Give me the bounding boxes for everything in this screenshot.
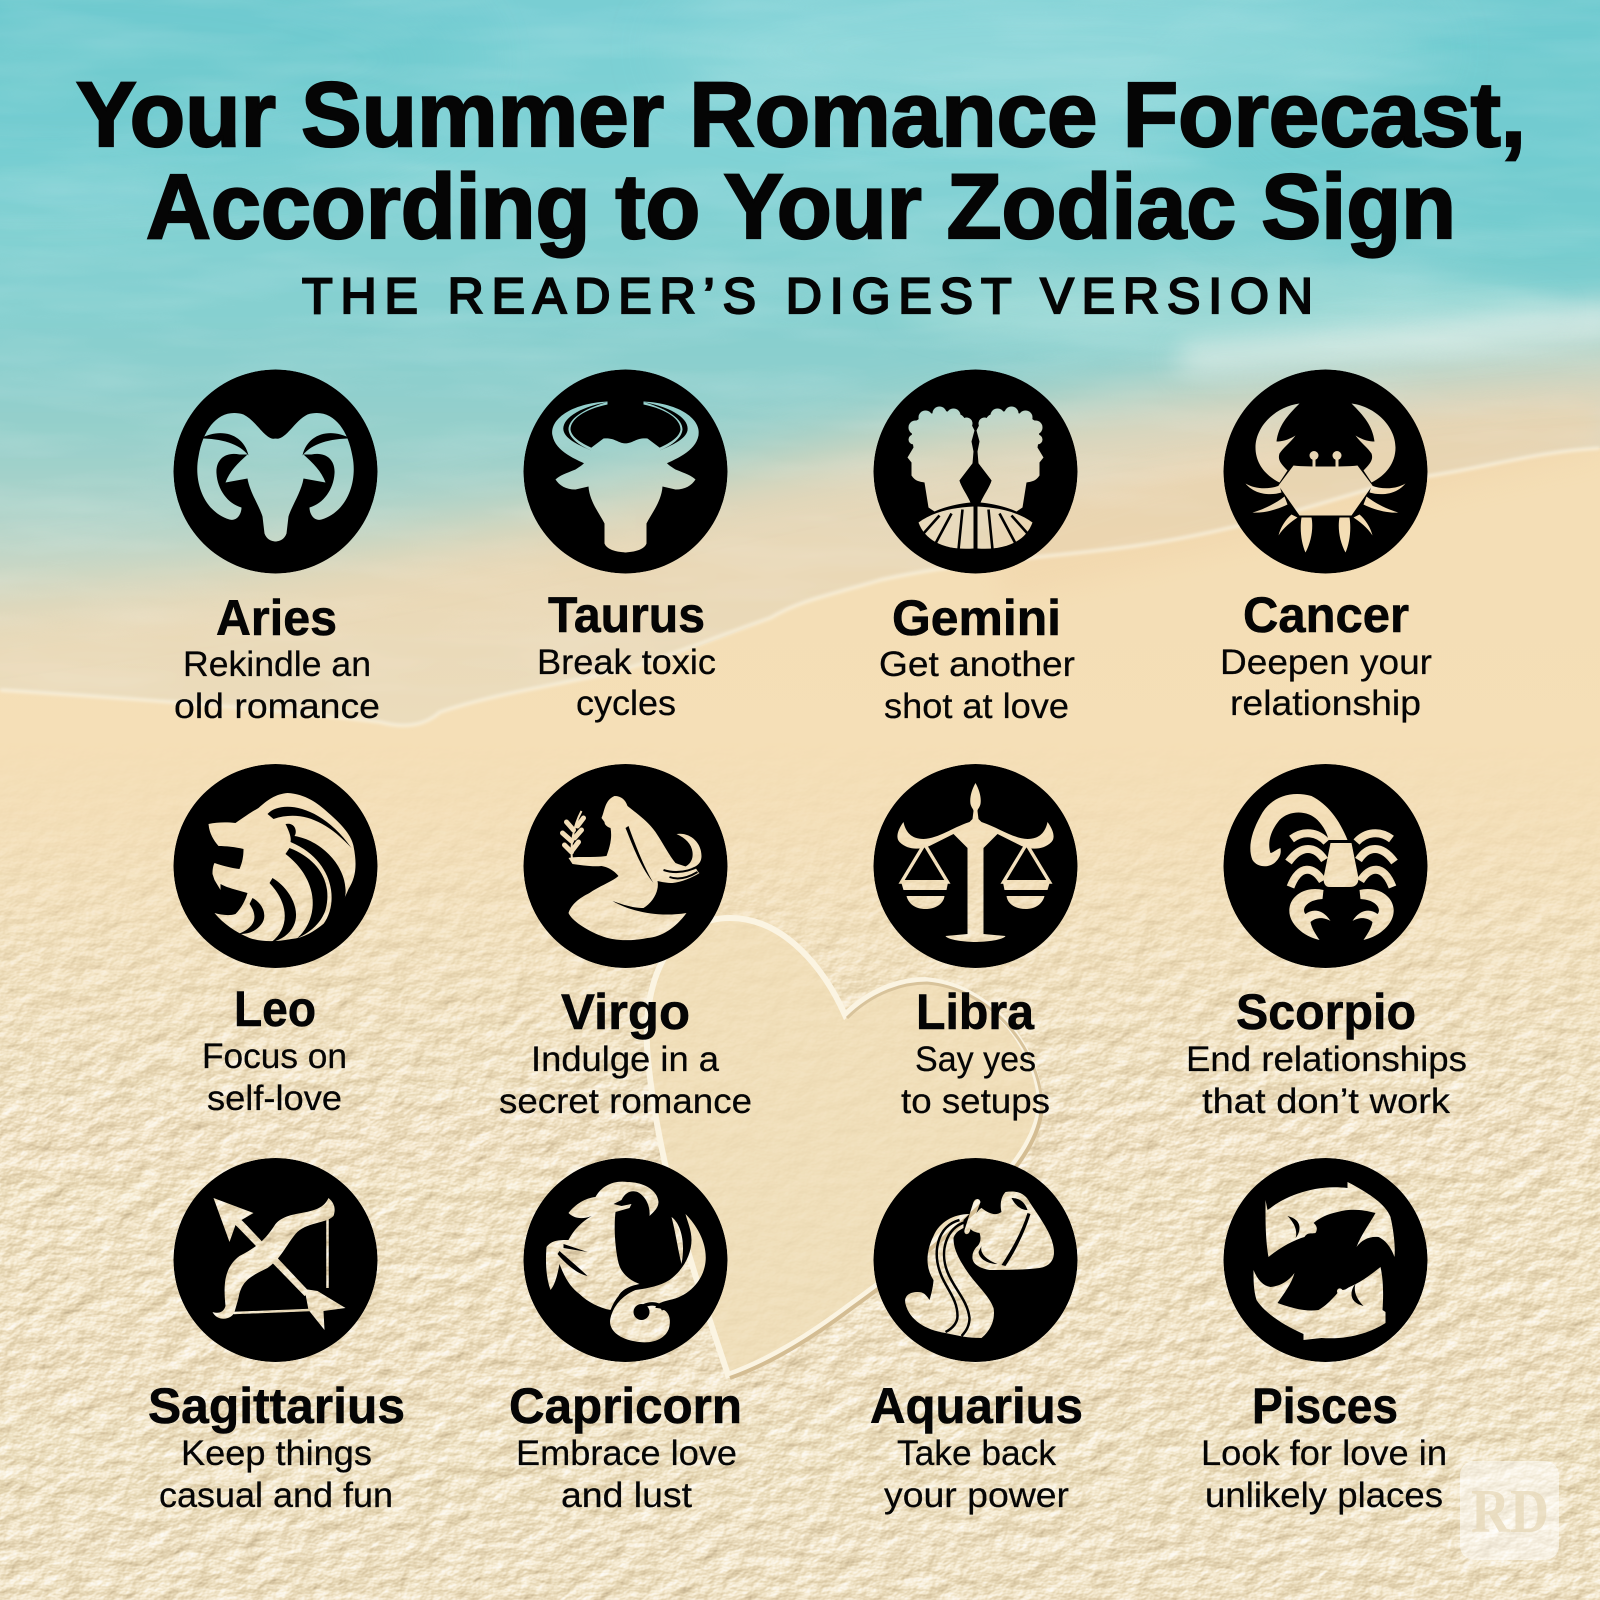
panel: Virgo bbox=[499, 764, 752, 1121]
forecast: Aquarius: your power bbox=[884, 1476, 1069, 1515]
logo: RD watermark bbox=[1460, 1461, 1559, 1560]
icon: fish bbox=[1224, 1158, 1428, 1362]
forecast: Aquarius bbox=[884, 1434, 1069, 1515]
forecast: Taurus: Break toxic bbox=[537, 643, 716, 682]
forecast: Sagittarius: casual and fun bbox=[159, 1476, 393, 1515]
forecast: Aquarius: Take back bbox=[897, 1434, 1056, 1473]
forecast: Sagittarius: Keep things bbox=[181, 1434, 372, 1473]
forecast: Capricorn: Embrace love bbox=[516, 1434, 737, 1473]
forecast: Aries: old romance bbox=[174, 687, 380, 726]
heart drawn in the sand bbox=[647, 918, 1042, 1378]
panel: Aries bbox=[174, 370, 380, 726]
forecast: Pisces bbox=[1201, 1434, 1447, 1515]
label: Virgo: Virgo bbox=[561, 984, 690, 1040]
title bbox=[76, 64, 1526, 258]
forecast: Taurus: cycles bbox=[576, 684, 676, 723]
forecast: Virgo bbox=[499, 1040, 752, 1121]
subtitle: THE READER’S DIGEST VERSION bbox=[302, 268, 1313, 324]
forecast: Sagittarius bbox=[159, 1434, 393, 1515]
forecast: Pisces: Look for love in bbox=[1201, 1434, 1447, 1473]
panel: Libra bbox=[874, 764, 1078, 1121]
label: Pisces: Pisces bbox=[1252, 1378, 1398, 1434]
label: Leo: Leo bbox=[234, 981, 316, 1037]
panel: Taurus bbox=[524, 370, 728, 723]
panel: Scorpio bbox=[1186, 764, 1467, 1121]
icon: scales bbox=[874, 764, 1078, 968]
title: Your Summer Romance Forecast, bbox=[76, 64, 1526, 166]
icon: bow and arrow bbox=[174, 1158, 378, 1362]
label: Gemini: Gemini bbox=[892, 590, 1061, 646]
logo: RD watermark: RD bbox=[1471, 1478, 1549, 1546]
forecast: Gemini: Get another bbox=[879, 645, 1075, 684]
label: Cancer: Cancer bbox=[1243, 587, 1409, 643]
label: Libra: Libra bbox=[916, 984, 1035, 1040]
forecast: Cancer: Deepen your bbox=[1220, 643, 1432, 682]
forecast: Libra: Say yes bbox=[915, 1040, 1036, 1079]
label: Aries: Aries bbox=[216, 590, 337, 646]
forecast: Leo bbox=[202, 1037, 347, 1118]
forecast: Leo: Focus on bbox=[202, 1037, 347, 1076]
forecast: Capricorn: and lust bbox=[561, 1476, 692, 1515]
forecast: Libra bbox=[901, 1040, 1050, 1121]
forecast: Cancer: relationship bbox=[1230, 684, 1421, 723]
label: Sagittarius: Sagittarius bbox=[148, 1378, 405, 1434]
icon: bull bbox=[524, 370, 728, 574]
forecast: Scorpio: End relationships bbox=[1186, 1040, 1467, 1079]
forecast: Capricorn bbox=[516, 1434, 737, 1515]
label: Taurus: Taurus bbox=[548, 587, 705, 643]
panel: Pisces bbox=[1201, 1158, 1447, 1515]
panel: Capricorn bbox=[509, 1158, 742, 1515]
icon: twins bbox=[874, 370, 1078, 574]
icon: maiden bbox=[524, 764, 728, 968]
forecast: Scorpio: that don’t work bbox=[1202, 1082, 1451, 1121]
icon: water bearer bbox=[874, 1158, 1078, 1362]
icon: sea goat bbox=[524, 1158, 728, 1362]
panel: Cancer bbox=[1220, 370, 1432, 723]
forecast: Pisces: unlikely places bbox=[1205, 1476, 1443, 1515]
forecast: Aries bbox=[174, 645, 380, 726]
forecast: Aries: Rekindle an bbox=[183, 645, 371, 684]
forecast: Gemini bbox=[879, 645, 1075, 726]
label: Capricorn: Capricorn bbox=[509, 1378, 742, 1434]
panel: Sagittarius bbox=[148, 1158, 405, 1515]
forecast: Virgo: Indulge in a bbox=[531, 1040, 720, 1079]
panel: Leo bbox=[174, 764, 378, 1118]
label: Scorpio: Scorpio bbox=[1236, 984, 1416, 1040]
forecast: Virgo: secret romance bbox=[499, 1082, 752, 1121]
icon: scorpion bbox=[1224, 764, 1428, 968]
icon: ram bbox=[174, 370, 378, 574]
panel: Gemini bbox=[874, 370, 1078, 726]
panel: Aquarius bbox=[870, 1158, 1083, 1515]
forecast: Taurus bbox=[537, 643, 716, 723]
title: According to Your Zodiac Sign bbox=[146, 156, 1456, 258]
forecast: Gemini: shot at love bbox=[884, 687, 1069, 726]
forecast: Libra: to setups bbox=[901, 1082, 1050, 1121]
icon: lion bbox=[174, 764, 378, 968]
forecast: Scorpio bbox=[1186, 1040, 1467, 1121]
icon: crab bbox=[1224, 370, 1428, 574]
forecast: Leo: self-love bbox=[207, 1079, 342, 1118]
forecast: Cancer bbox=[1220, 643, 1432, 723]
label: Aquarius: Aquarius bbox=[870, 1378, 1083, 1434]
